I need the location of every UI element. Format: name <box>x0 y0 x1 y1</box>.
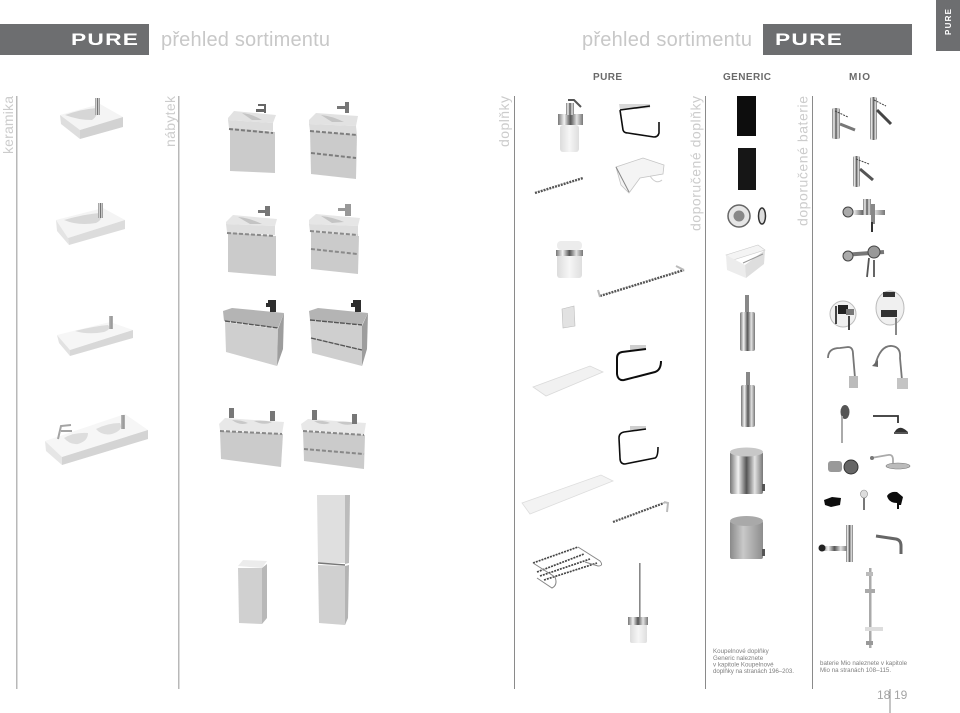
flush button <box>728 205 750 227</box>
right heading: přehled sortimentu <box>582 29 752 51</box>
towel bar short <box>535 178 583 193</box>
note: Generic <box>713 648 794 675</box>
cabinet 3 <box>226 206 277 276</box>
low cabinet <box>238 560 267 624</box>
pedal bin 2 <box>730 516 765 559</box>
column heading: PURE: PURE <box>593 72 622 83</box>
mini handset <box>860 490 868 510</box>
section label: doporučené baterie: doporučené baterie <box>794 96 810 226</box>
soap dispenser <box>558 100 583 152</box>
towel bar 3 <box>613 502 668 522</box>
towel rack <box>533 547 602 588</box>
note: Generic: Generic naleznete <box>713 655 764 662</box>
note: Generic: doplňky na stranách 196–203. <box>713 668 794 675</box>
dark tile 1 <box>737 96 756 136</box>
right header bar <box>763 24 912 55</box>
flush button side <box>758 208 766 224</box>
toilet brush <box>628 563 648 643</box>
right header bar: PURE <box>775 31 842 49</box>
section label: doplňky: doplňky <box>496 96 512 147</box>
cabinet 1 <box>228 104 276 173</box>
black lever small <box>824 497 841 507</box>
column heading: MIO: MIO <box>849 72 870 83</box>
hand shower <box>840 405 850 443</box>
tissue box <box>726 245 765 278</box>
note: Mio: Mio na stranách 108–115. <box>820 667 891 674</box>
panel: PURE accessories <box>522 100 684 643</box>
basin faucet medium <box>853 156 873 187</box>
tall cabinet <box>317 495 350 625</box>
bath mixer <box>843 199 885 232</box>
page numbers: 18 <box>877 688 891 702</box>
soap dish glass <box>556 241 583 278</box>
kitchen faucet 2 <box>872 346 908 389</box>
cabinet 4 <box>309 204 360 274</box>
cabinet 5 <box>223 300 284 366</box>
towel ring 2 <box>617 345 661 380</box>
towel ring 3 <box>619 426 658 464</box>
column heading: GENERIC: GENERIC <box>723 72 771 83</box>
note: Generic: Koupelnové doplňky <box>713 648 770 655</box>
panel: ceramic basins <box>45 98 148 465</box>
note: Mio <box>820 660 908 674</box>
bath spout <box>876 536 901 554</box>
shower slide bar <box>865 568 883 648</box>
double cabinet 2 <box>301 410 366 469</box>
basin 2 <box>56 203 125 245</box>
towel ring 1 <box>619 104 659 137</box>
glass shelf 2 <box>522 475 613 514</box>
side tab <box>936 0 960 51</box>
double basin <box>45 414 148 465</box>
double cabinet 1 <box>219 408 284 467</box>
pedal bin 1 <box>730 448 765 494</box>
shower mixer <box>843 246 884 277</box>
section label: doporučené doplňky: doporučené doplňky <box>688 96 704 231</box>
paper holder <box>616 158 664 193</box>
long towel bar <box>598 266 684 297</box>
section label: keramika: keramika <box>0 96 16 154</box>
toilet brush holder 1 <box>740 295 755 351</box>
left header bar <box>0 24 149 55</box>
rain shower <box>870 455 910 469</box>
panel: furniture <box>219 102 368 625</box>
note: Generic: v kapitole Koupelnové <box>713 662 774 668</box>
bottle siphon <box>818 525 853 562</box>
round controls <box>828 460 858 474</box>
shower head with arm <box>873 416 908 433</box>
small holder <box>562 306 575 328</box>
basin 1 <box>60 98 123 139</box>
black lever <box>887 492 903 509</box>
section label: nábytek: nábytek <box>162 95 178 147</box>
concealed mixer 1 <box>830 301 856 330</box>
note: Mio: baterie Mio naleznete v kapitole <box>820 660 908 667</box>
panel: Generic accessories <box>713 96 794 675</box>
basin faucet tall <box>870 97 891 140</box>
panel: Mio faucets <box>818 97 910 674</box>
cabinet 6 <box>309 300 368 366</box>
dark tile 2 <box>738 148 756 190</box>
page numbers <box>877 688 908 713</box>
left heading: přehled sortimentu <box>161 29 330 51</box>
cabinet 2 <box>309 102 358 179</box>
basin 3 <box>57 316 133 356</box>
side tab: PURE <box>944 8 953 35</box>
left header bar: PURE <box>71 31 138 49</box>
page numbers: 19 <box>894 688 908 702</box>
toilet brush holder 2 <box>741 372 755 427</box>
kitchen faucet 1 <box>828 347 858 388</box>
basin faucet low <box>832 108 855 139</box>
concealed mixer 2 <box>876 291 904 335</box>
glass shelf 1 <box>533 366 603 396</box>
